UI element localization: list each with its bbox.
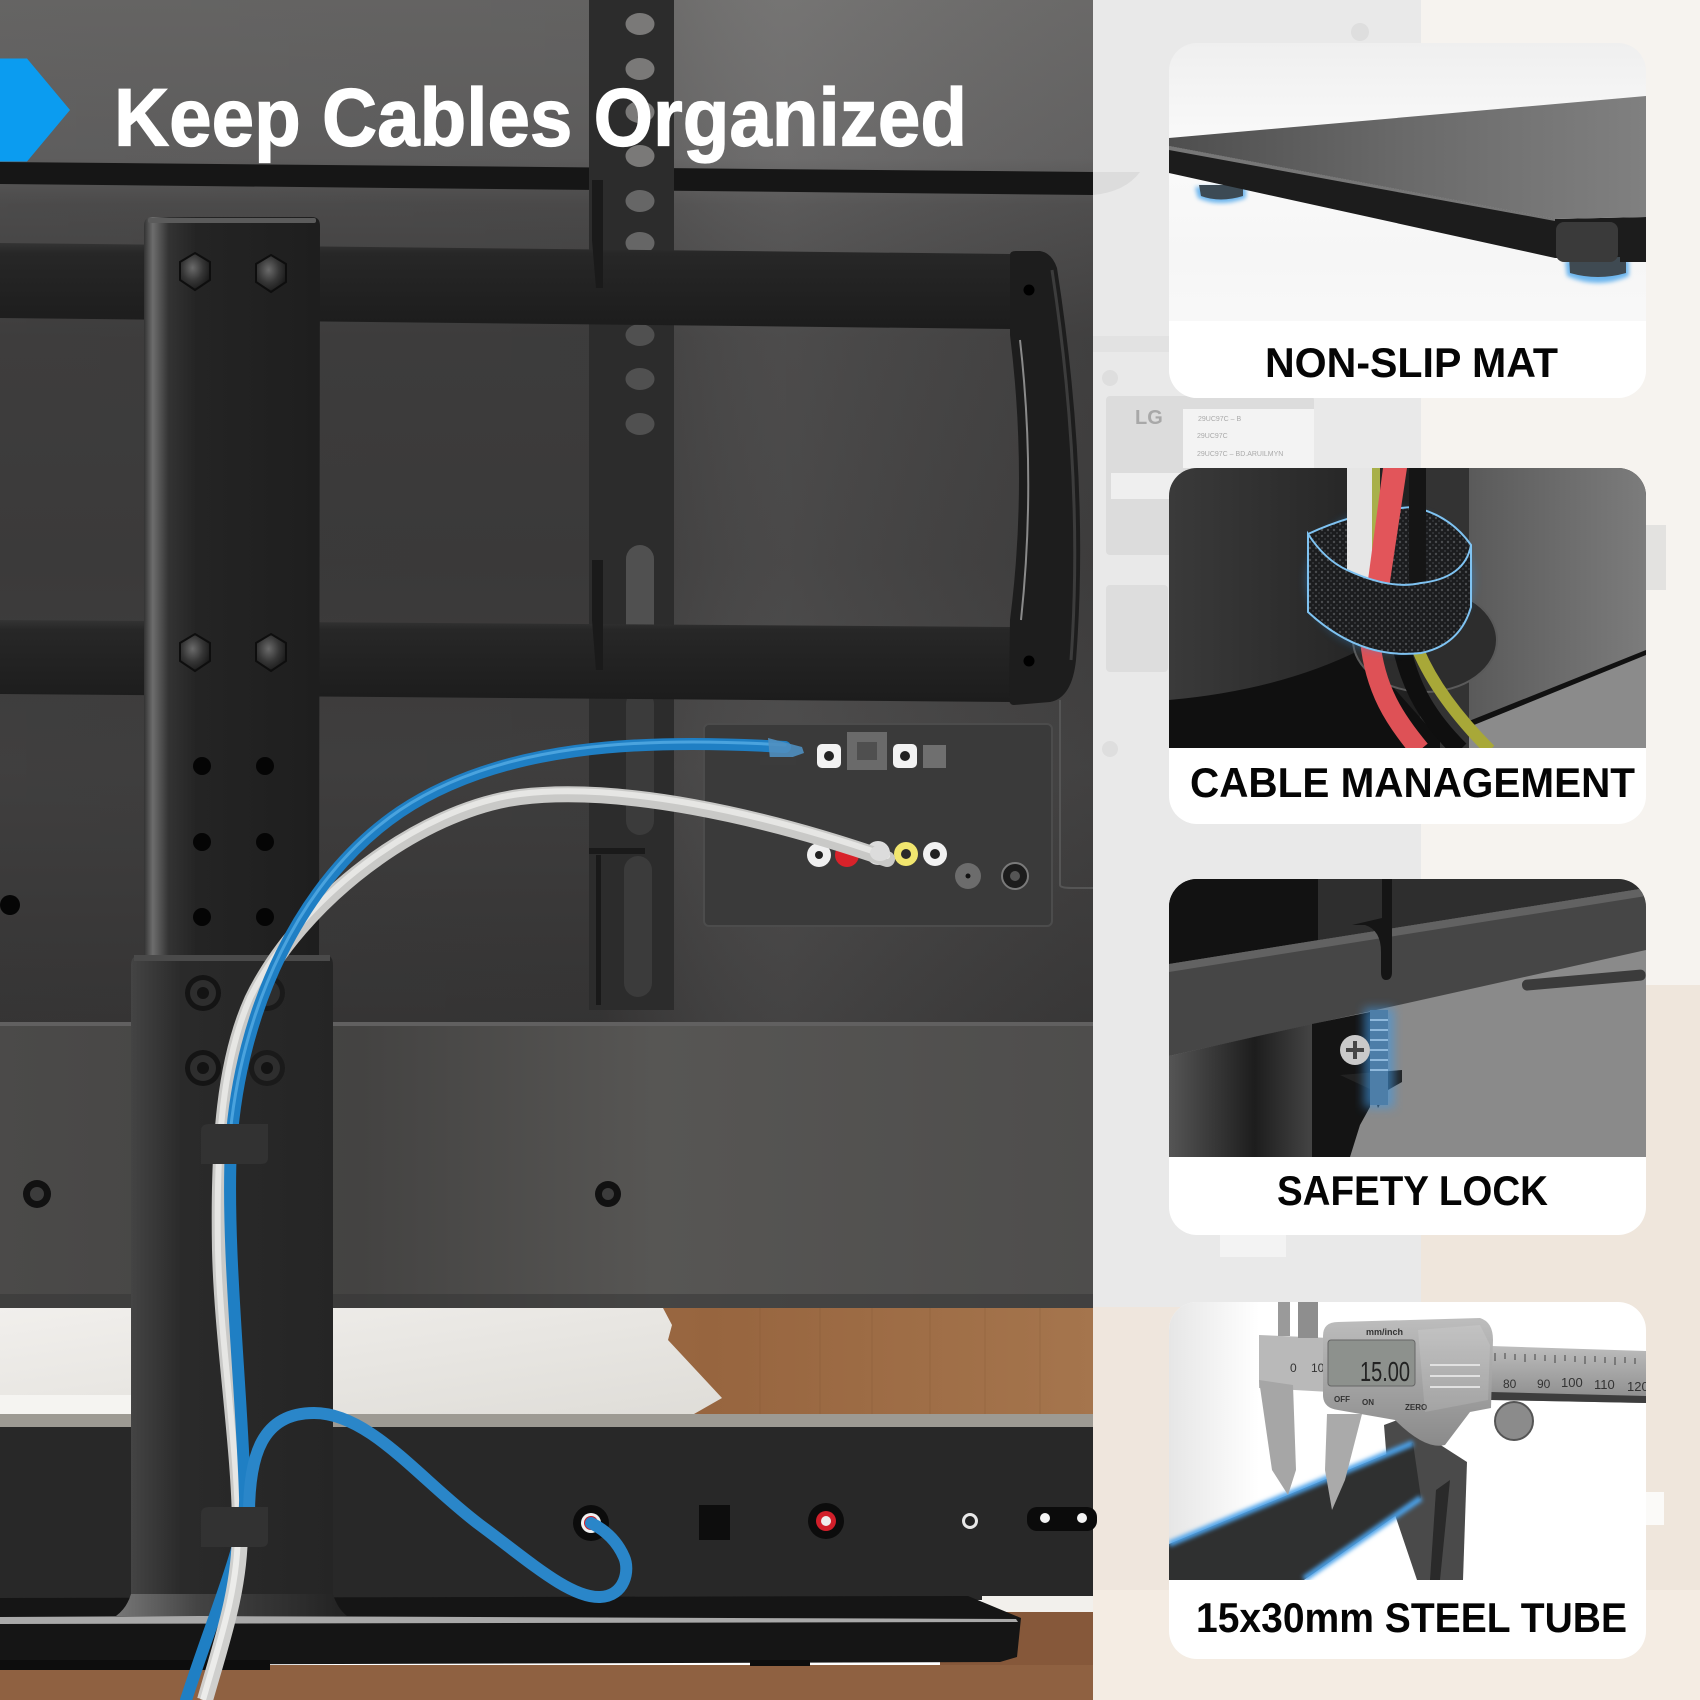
caption bar: [1169, 748, 1646, 824]
caption bar: [1169, 1580, 1646, 1659]
velcro strap front: [1308, 534, 1471, 654]
white cable: [218, 791, 887, 1529]
caliper ruler: 10: [1311, 1361, 1325, 1375]
foot near: [1565, 256, 1629, 283]
upper crossbar: [0, 243, 1010, 329]
side hole: [0, 895, 20, 915]
tabletop and right wall: [0, 1596, 1093, 1700]
white cable lower overlap: [203, 1520, 240, 1700]
left column: [1169, 1024, 1312, 1157]
caliper body: ZERO: [1405, 1403, 1427, 1412]
LCD screen: [1328, 1340, 1415, 1386]
cable clip lower: [201, 1507, 268, 1547]
faded right background: 29UC97C – BD.ARUILMYN: [1197, 451, 1283, 458]
sleeve bolts: [185, 975, 285, 1086]
lower TV panel: [0, 1022, 1093, 1308]
TV back wall: [0, 0, 1093, 1022]
thumb wheel: [1495, 1402, 1533, 1440]
stand shadow: [1169, 650, 1440, 748]
caliper ruler: 90: [1537, 1377, 1551, 1391]
faded right background: LG: [1135, 407, 1163, 429]
faded right background: 29UC97C – B: [1198, 416, 1242, 423]
caliper body: ON: [1362, 1398, 1374, 1407]
caliper ruler: 80: [1503, 1377, 1517, 1391]
port panel: [704, 700, 1093, 926]
caption bar: [1169, 1157, 1646, 1235]
cables below strap: [1370, 640, 1490, 750]
caliper body: OFF: [1334, 1395, 1350, 1404]
caliper ruler: [1259, 1335, 1649, 1403]
base plate: [0, 1596, 1021, 1670]
stand: [1384, 1419, 1467, 1580]
lower sleeve: [131, 955, 333, 1600]
caliper ruler: 120: [1627, 1379, 1649, 1394]
caliper ruler: 0: [1290, 1361, 1297, 1375]
column bolts: [180, 253, 286, 671]
panel: cable management: [1169, 468, 1646, 824]
panel: steel tube: [1169, 1302, 1649, 1659]
VESA bracket with holes: [589, 0, 674, 1010]
faded right background: [1093, 0, 1700, 1700]
phillips screw: [1340, 1035, 1370, 1065]
grommet cone: [1352, 602, 1496, 693]
panel: steel tube: 15x30mm STEEL TUBE: [1196, 1594, 1627, 1641]
foot far: [1195, 185, 1246, 203]
right gray panel: [1469, 468, 1646, 748]
TV screws: [23, 1180, 621, 1208]
blue cable: [186, 742, 785, 1700]
strap back: [1308, 506, 1472, 584]
strap glow: [1308, 510, 1472, 650]
caliper ruler: 110: [1594, 1377, 1615, 1392]
plate corner: [1556, 222, 1618, 262]
wood background window: [0, 1308, 1093, 1414]
caliper body: 15.00: [1360, 1356, 1410, 1387]
caption bar: [1187, 396, 1194, 398]
blue threaded bolt: [1364, 1008, 1394, 1108]
dark TV edge band: [0, 162, 1093, 195]
dark product scene: [0, 0, 1097, 1700]
lower tab: [1340, 1070, 1402, 1108]
panel: cable management: CABLE MANAGEMENT: [1190, 759, 1635, 806]
column base flare: [116, 1594, 347, 1616]
plate top: [1169, 96, 1646, 219]
bracket clips: [592, 180, 603, 670]
white cable plug: [870, 845, 890, 861]
steel tube: [1169, 1443, 1421, 1580]
icon: blue arrow marker: [0, 58, 70, 162]
plate edge: [1169, 146, 1646, 262]
column holes: [193, 757, 274, 926]
faded right background: 29UC97C: [1197, 433, 1228, 440]
diagonal edge: [1469, 652, 1646, 748]
caliper jaws: [1259, 1302, 1362, 1510]
curved end bracket: [1009, 251, 1080, 705]
panel: safety lock: [1169, 879, 1646, 1235]
white pillow: [0, 1308, 722, 1414]
shelf strip: [0, 1395, 1093, 1427]
black bracket: [1312, 1012, 1370, 1157]
crossbar: [1169, 888, 1646, 1056]
caliper body: mm/inch: [1366, 1327, 1403, 1337]
audio ports: [573, 1503, 1097, 1541]
upright column: [144, 217, 320, 960]
panel: non-slip mat: [1169, 43, 1646, 398]
upper ports: [817, 732, 946, 770]
slot: [1522, 969, 1646, 991]
hook: [1352, 879, 1392, 980]
caliper ruler: 100: [1561, 1375, 1583, 1390]
cable connector: [760, 738, 804, 765]
lower crossbar: [0, 620, 1010, 702]
dark top area: [1169, 879, 1646, 964]
blue loop cable: [249, 1413, 626, 1597]
panel: safety lock: SAFETY LOCK: [1277, 1167, 1548, 1214]
title: Keep Cables Organized: [114, 72, 967, 164]
soundbar: [0, 1427, 1097, 1600]
panel: non-slip mat: NON-SLIP MAT: [1265, 339, 1558, 386]
caliper body: [1323, 1318, 1493, 1446]
lower ports: [807, 841, 1028, 889]
cables above strap: [1347, 468, 1426, 595]
cable clip upper: [201, 1124, 268, 1164]
